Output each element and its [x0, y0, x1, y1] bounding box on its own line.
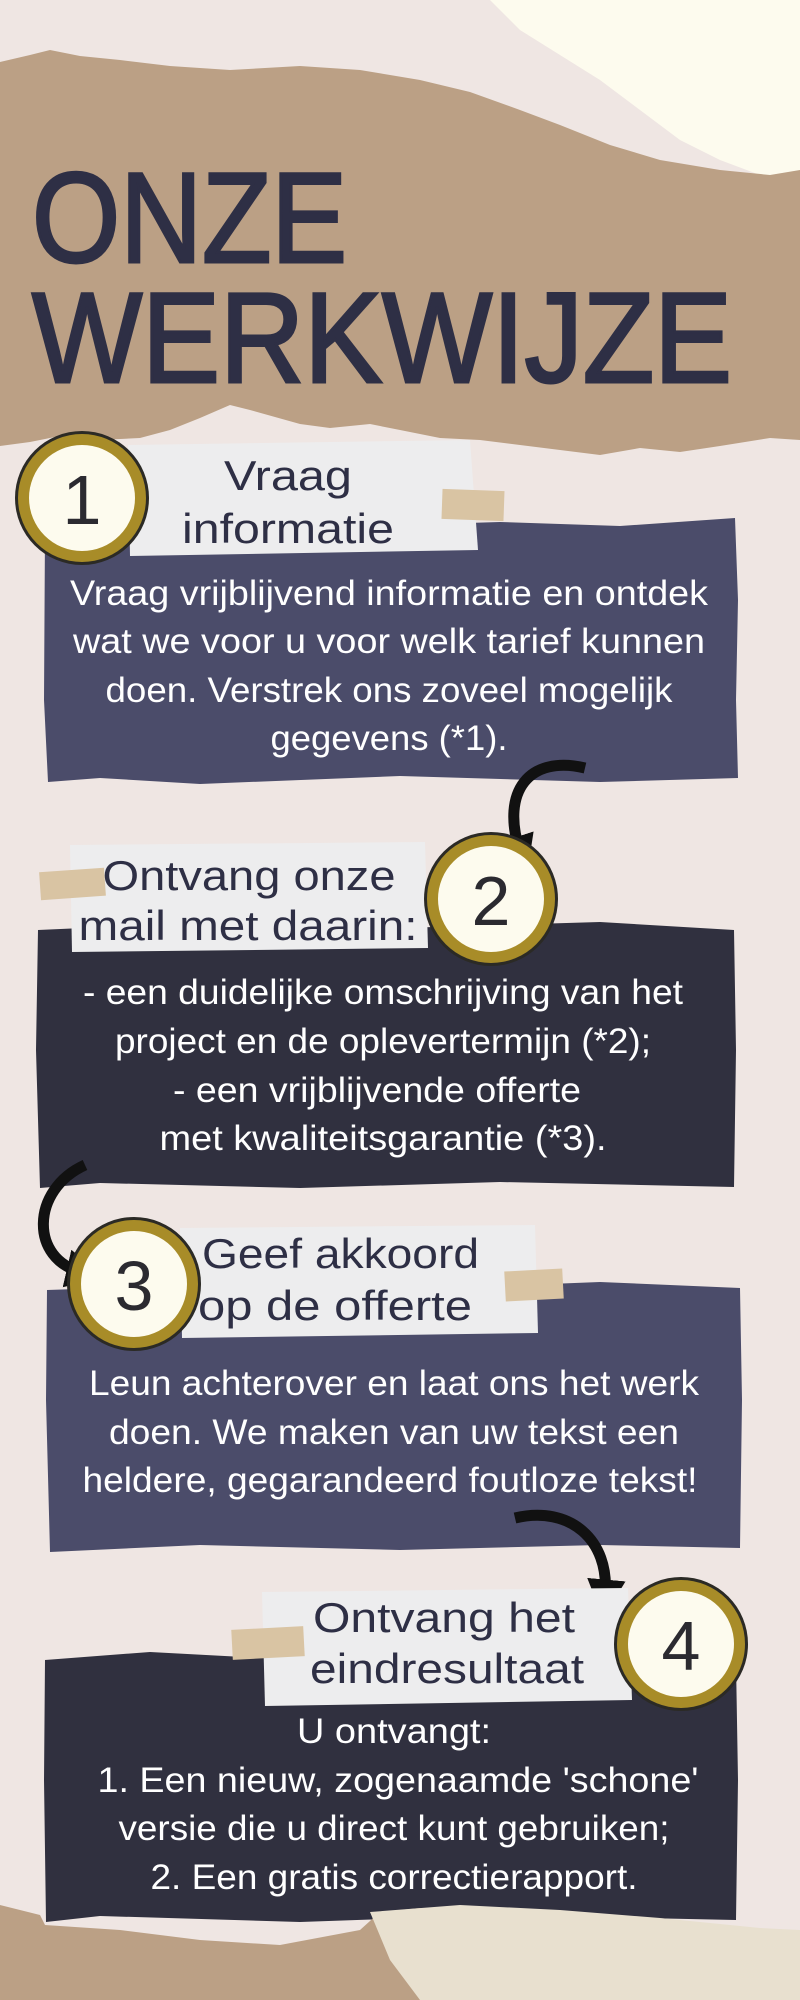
- label: step 2: Ontvang onze: [102, 852, 396, 899]
- icon: number 2: 2: [472, 862, 510, 940]
- text: step 4: [98, 1712, 698, 1897]
- text: step 2: - een vrijblijvende offerte: [173, 1071, 581, 1110]
- text: step 1: gegevens (*1).: [270, 719, 508, 758]
- text: step 2: met kwaliteitsgarantie (*3).: [160, 1119, 606, 1158]
- icon: number 4: [614, 1577, 748, 1711]
- label: step 2: [39, 842, 428, 952]
- title: ONZE: [32, 147, 347, 290]
- icon: number 3: [67, 1217, 201, 1351]
- label: step 4: eindresultaat: [310, 1645, 584, 1692]
- text: step 4: U ontvangt:: [297, 1712, 491, 1751]
- label: step 1: [128, 440, 505, 556]
- arrow: 1 to 2: [514, 765, 585, 852]
- panel: step 4: [44, 1577, 748, 1922]
- brown torn paper band: [0, 50, 800, 455]
- text: step 3: doen. We maken van uw tekst een: [109, 1413, 679, 1452]
- icon: number 1: [15, 431, 149, 565]
- text: step 2: project en de oplevertermijn (*2);: [115, 1022, 651, 1061]
- title: [32, 147, 732, 410]
- label: step 3: Geef akkoord: [202, 1230, 479, 1277]
- arrow: 2 to 3: [43, 1165, 85, 1272]
- text: step 1: wat we voor u voor welk tarief kunnen: [72, 622, 705, 661]
- title: WERKWIJZE: [32, 267, 732, 410]
- text: step 2: - een duidelijke omschrijving van het: [83, 973, 683, 1012]
- text: step 4: 2. Een gratis correctierapport.: [150, 1858, 638, 1897]
- panel: step 1: [15, 431, 738, 784]
- label: step 4: Ontvang het: [313, 1594, 575, 1641]
- cream paper top right: [490, 0, 800, 180]
- text: step 3: [82, 1364, 700, 1500]
- text: step 4: versie die u direct kunt gebruiken;: [118, 1809, 670, 1848]
- text: step 1: doen. Verstrek ons zoveel mogelijk: [106, 671, 673, 710]
- icon: number 4: 4: [662, 1607, 700, 1685]
- text: step 3: Leun achterover en laat ons het werk: [89, 1364, 700, 1403]
- text: step 1: Vraag vrijblijvend informatie en ontdek: [70, 574, 709, 613]
- icon: number 1: 1: [63, 461, 101, 539]
- bottom torn paper strip: [0, 1905, 800, 2000]
- arrow: 3 to 4: [515, 1515, 605, 1595]
- label: step 2: mail met daarin:: [78, 902, 418, 949]
- panel: step 3: [46, 1217, 742, 1552]
- label: step 1: informatie: [182, 505, 394, 552]
- label: step 4: [231, 1588, 632, 1706]
- label: step 1: Vraag: [224, 452, 352, 499]
- label: step 3: op de offerte: [198, 1282, 472, 1329]
- panel: step 2: [36, 832, 736, 1188]
- text: step 4: 1. Een nieuw, zogenaamde 'schone': [98, 1761, 698, 1800]
- text: step 3: heldere, gegarandeerd foutloze tekst!: [82, 1461, 698, 1500]
- text: step 2: [83, 973, 683, 1158]
- icon: number 2: [424, 832, 558, 966]
- label: step 3: [180, 1225, 564, 1338]
- text: step 1: [70, 574, 709, 758]
- icon: number 3: 3: [115, 1247, 153, 1325]
